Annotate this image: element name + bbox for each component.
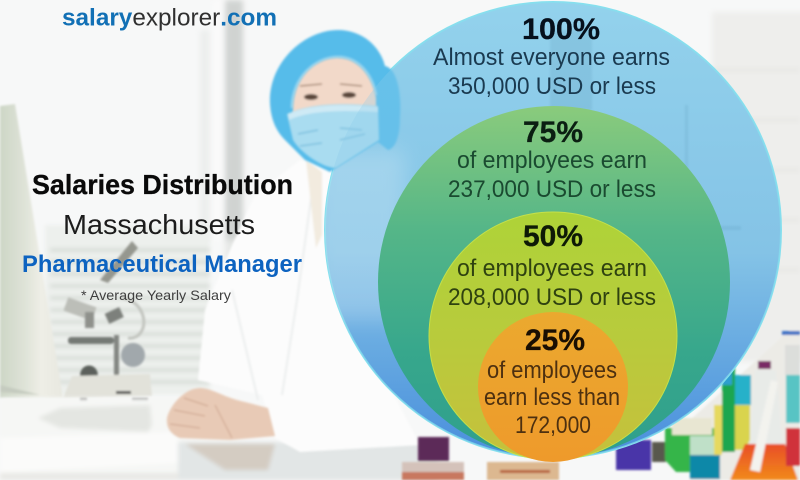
text: of employees earn: of employees earn bbox=[457, 147, 647, 174]
note: average yearly salary: * Average Yearly Salary bbox=[81, 287, 231, 303]
lab bottles and flasks bbox=[402, 330, 800, 480]
text: 208,000 USD or less: 208,000 USD or less bbox=[448, 284, 656, 311]
value: 75%: 75% bbox=[523, 116, 583, 149]
desk and papers bbox=[0, 398, 438, 480]
circle: 75 percent bbox=[378, 106, 730, 458]
text: of employees earn: of employees earn bbox=[457, 255, 647, 282]
value: 100%: 100% bbox=[522, 13, 600, 46]
circle: 50 percent bbox=[429, 212, 677, 460]
white coat glow through the circle bbox=[315, 150, 405, 320]
value: 50%: 50% bbox=[523, 220, 583, 253]
person: hair net bbox=[270, 30, 400, 172]
wall tone behind bottles bbox=[690, 330, 800, 480]
text: almost everyone earns: Almost everyone earns bbox=[433, 44, 670, 71]
circle tint over the person bbox=[325, 2, 781, 458]
text: 237,000 USD or less: 237,000 USD or less bbox=[448, 176, 656, 203]
person: surgical mask bbox=[287, 104, 379, 168]
logo: salaryexplorer.com: salaryexplorer.com bbox=[62, 4, 277, 32]
person: lab coat bbox=[198, 160, 420, 452]
person: face bbox=[293, 58, 376, 116]
computer monitor bbox=[0, 104, 63, 398]
text: 350,000 USD or less: 350,000 USD or less bbox=[448, 73, 656, 100]
value: 25%: 25% bbox=[525, 324, 585, 357]
window frame bbox=[200, 0, 243, 270]
heading: Salaries Distribution: Salaries Distribution bbox=[32, 169, 293, 200]
location: Massachusetts: Massachusetts bbox=[63, 209, 255, 240]
circle: 100 percent bbox=[270, 2, 781, 458]
person: clasped hands bbox=[167, 388, 275, 440]
text: earn less than: earn less than bbox=[484, 384, 620, 411]
microscope bbox=[63, 241, 152, 404]
right wall bbox=[712, 12, 800, 362]
job title: Pharmaceutical Manager: Pharmaceutical Manager bbox=[22, 251, 302, 278]
blinds and wall behind microscope bbox=[45, 225, 210, 395]
text: of employees: of employees bbox=[487, 357, 617, 384]
faint background lab apparatus showing through bbox=[550, 30, 741, 295]
text: 172,000: 172,000 bbox=[515, 412, 591, 439]
circle: 25 percent bbox=[478, 312, 628, 462]
